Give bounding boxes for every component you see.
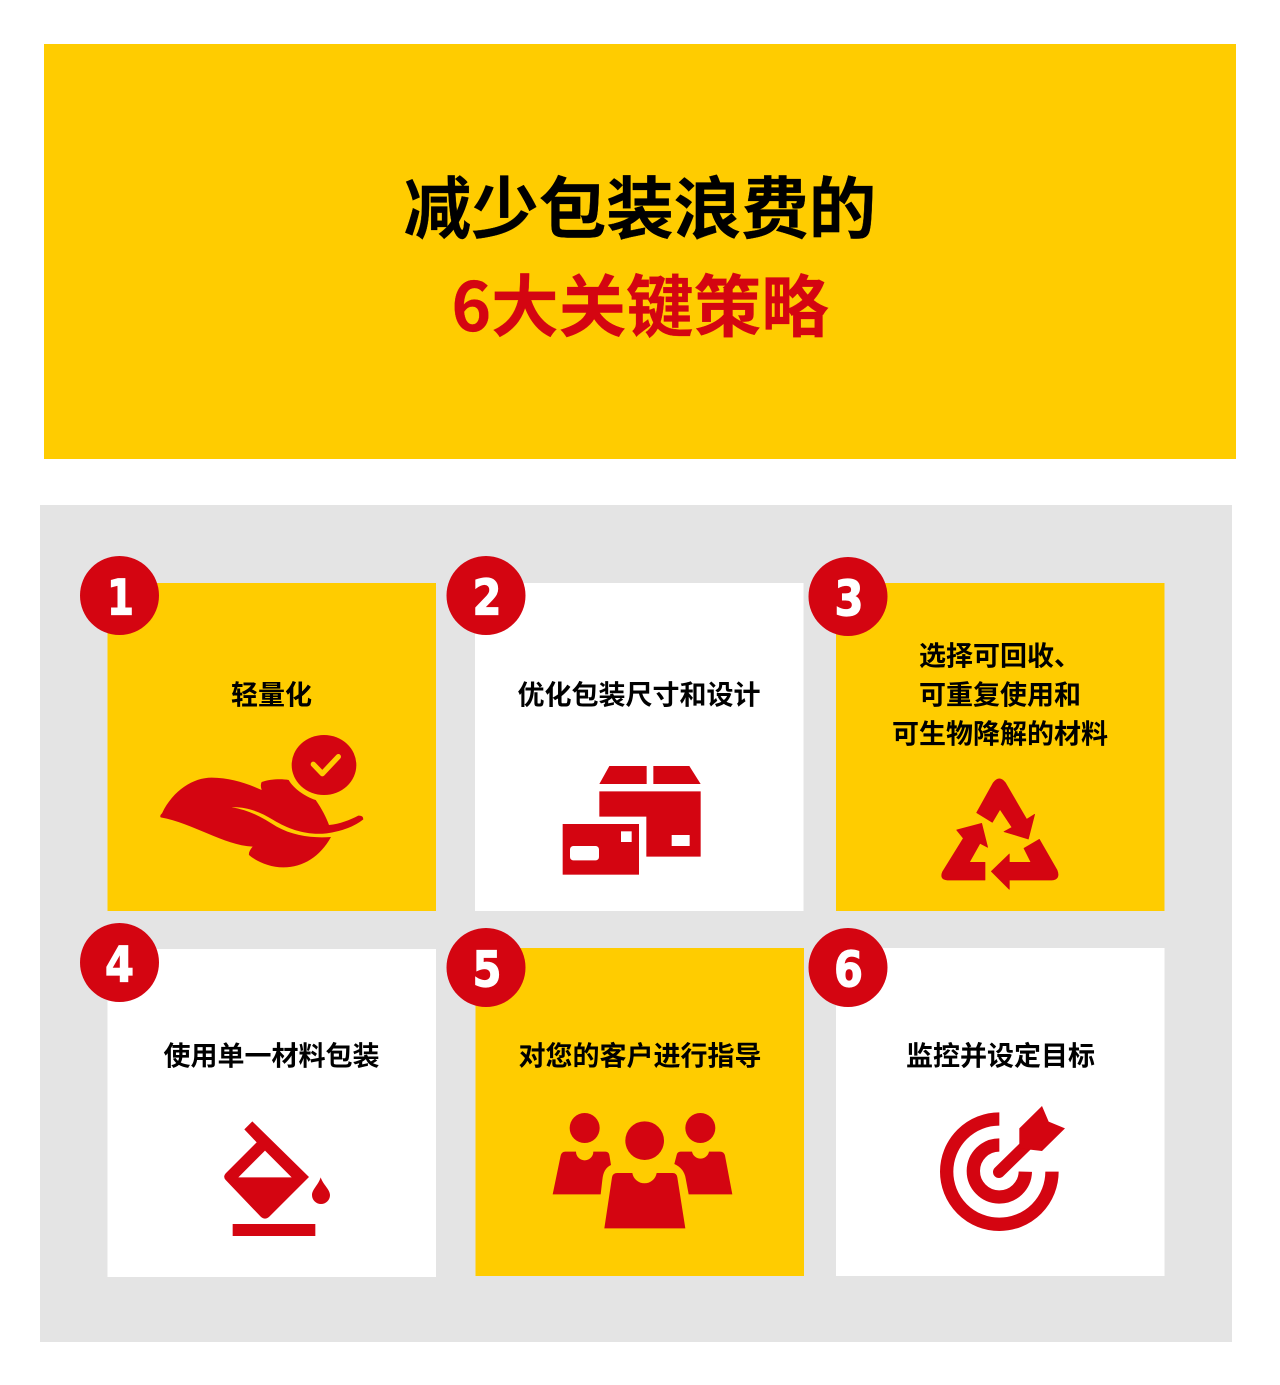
badge 5 [446, 928, 526, 1007]
icon: people [553, 1113, 732, 1228]
card 2: optimize size and design [446, 556, 804, 911]
card 3 heading: 可生物降解的材料 [892, 712, 1108, 752]
title line 2: 6大关键策略 [451, 254, 829, 351]
card 1: lightweighting [80, 556, 436, 911]
card 6 heading: 监控并设定目标 [906, 1034, 1095, 1074]
icon: paint bucket [224, 1121, 330, 1236]
badge 6 [808, 928, 888, 1007]
card 4 heading: 使用单一材料包装 [164, 1034, 380, 1074]
panel: strategies background [40, 505, 1232, 1342]
badge 6: 6 [834, 942, 863, 998]
card 3: recyclable materials [808, 557, 1164, 911]
badge 2: 2 [472, 570, 502, 626]
card 3 heading: 选择可回收、 [919, 634, 1081, 674]
card 6: monitor and set goals [808, 928, 1164, 1276]
badge 1: 1 [107, 570, 134, 626]
badge 4 [80, 923, 159, 1002]
card 4: single material packaging [80, 923, 436, 1277]
card 1 heading: 轻量化 [231, 674, 312, 712]
icon: leaf with check [160, 735, 363, 867]
badge 3: 3 [834, 570, 864, 628]
panel: title banner [44, 44, 1236, 459]
card 3 heading [892, 634, 1108, 752]
badge 3 [808, 557, 888, 636]
icon: boxes [563, 766, 701, 875]
card 5 heading: 对您的客户进行指导 [518, 1034, 762, 1074]
card 3 heading: 可重复使用和 [919, 674, 1081, 712]
title line 1: 减少包装浪费的 [404, 156, 876, 253]
icon: recycle arrows [942, 779, 1058, 889]
icon: target with arrow [947, 1106, 1065, 1224]
card 2 heading: 优化包装尺寸和设计 [518, 674, 760, 712]
badge 5: 5 [472, 942, 502, 998]
badge 2 [446, 556, 526, 635]
card 5: guide your customers [446, 928, 804, 1276]
badge 1 [80, 556, 159, 635]
badge 4: 4 [105, 936, 134, 994]
